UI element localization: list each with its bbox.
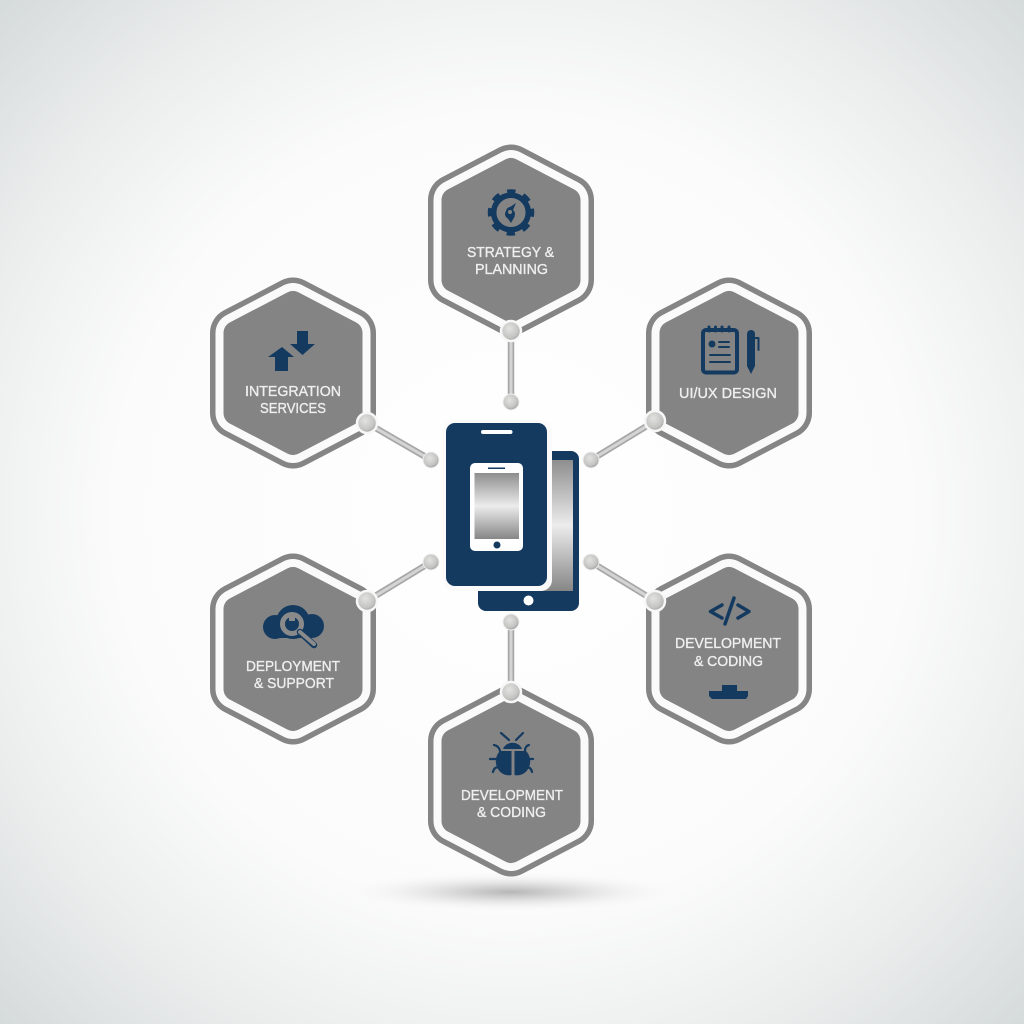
icon: gear with compass [490,192,532,234]
connector: development and coding right [583,554,655,601]
connector node: integration [357,413,377,433]
panel: integration services [236,303,350,443]
panel: strategy and planning [454,170,568,310]
connector: deployment and support [367,554,439,601]
label [246,658,340,692]
connector node: UI/UX [645,411,665,431]
icon: bug [490,733,533,775]
label [461,787,563,821]
label: STRATEGY & [467,244,554,261]
connector: strategy and planning [503,331,519,410]
connector: development and coding bottom [503,614,519,692]
connector node: deployment [357,591,377,611]
connector: UI/UX design [583,421,655,468]
connector node: development right [645,591,665,611]
panel: deployment and support [236,579,350,719]
ground shadow [341,872,681,912]
label: DEVELOPMENT [675,635,781,652]
label: & CODING [694,653,763,670]
label: PLANNING [475,261,548,278]
icon: up and down arrows [268,331,315,371]
panel: development and coding bottom [454,711,568,851]
label [675,635,781,670]
label: SERVICES [260,400,326,417]
label: & CODING [477,804,546,821]
label [467,244,554,278]
label: DEVELOPMENT [461,787,563,804]
back phone [478,451,579,611]
icon: base bar [709,685,748,699]
label: & SUPPORT [254,675,334,692]
panel: UI/UX design [672,303,786,443]
label [245,383,341,417]
panel: development and coding right [672,579,786,719]
connector node: development bottom [501,682,521,702]
label: DEPLOYMENT [246,658,340,675]
inner phone [470,463,523,551]
label: UI/UX DESIGN [679,385,777,402]
icon: code brackets [710,598,749,624]
connector: integration services [367,423,439,468]
icon: notepad and pen [703,327,758,374]
label: INTEGRATION [245,383,341,400]
front phone [443,420,552,591]
icon: cloud with magnifier [263,605,324,645]
connector node: strategy [501,321,521,341]
central phones icon [443,420,579,611]
